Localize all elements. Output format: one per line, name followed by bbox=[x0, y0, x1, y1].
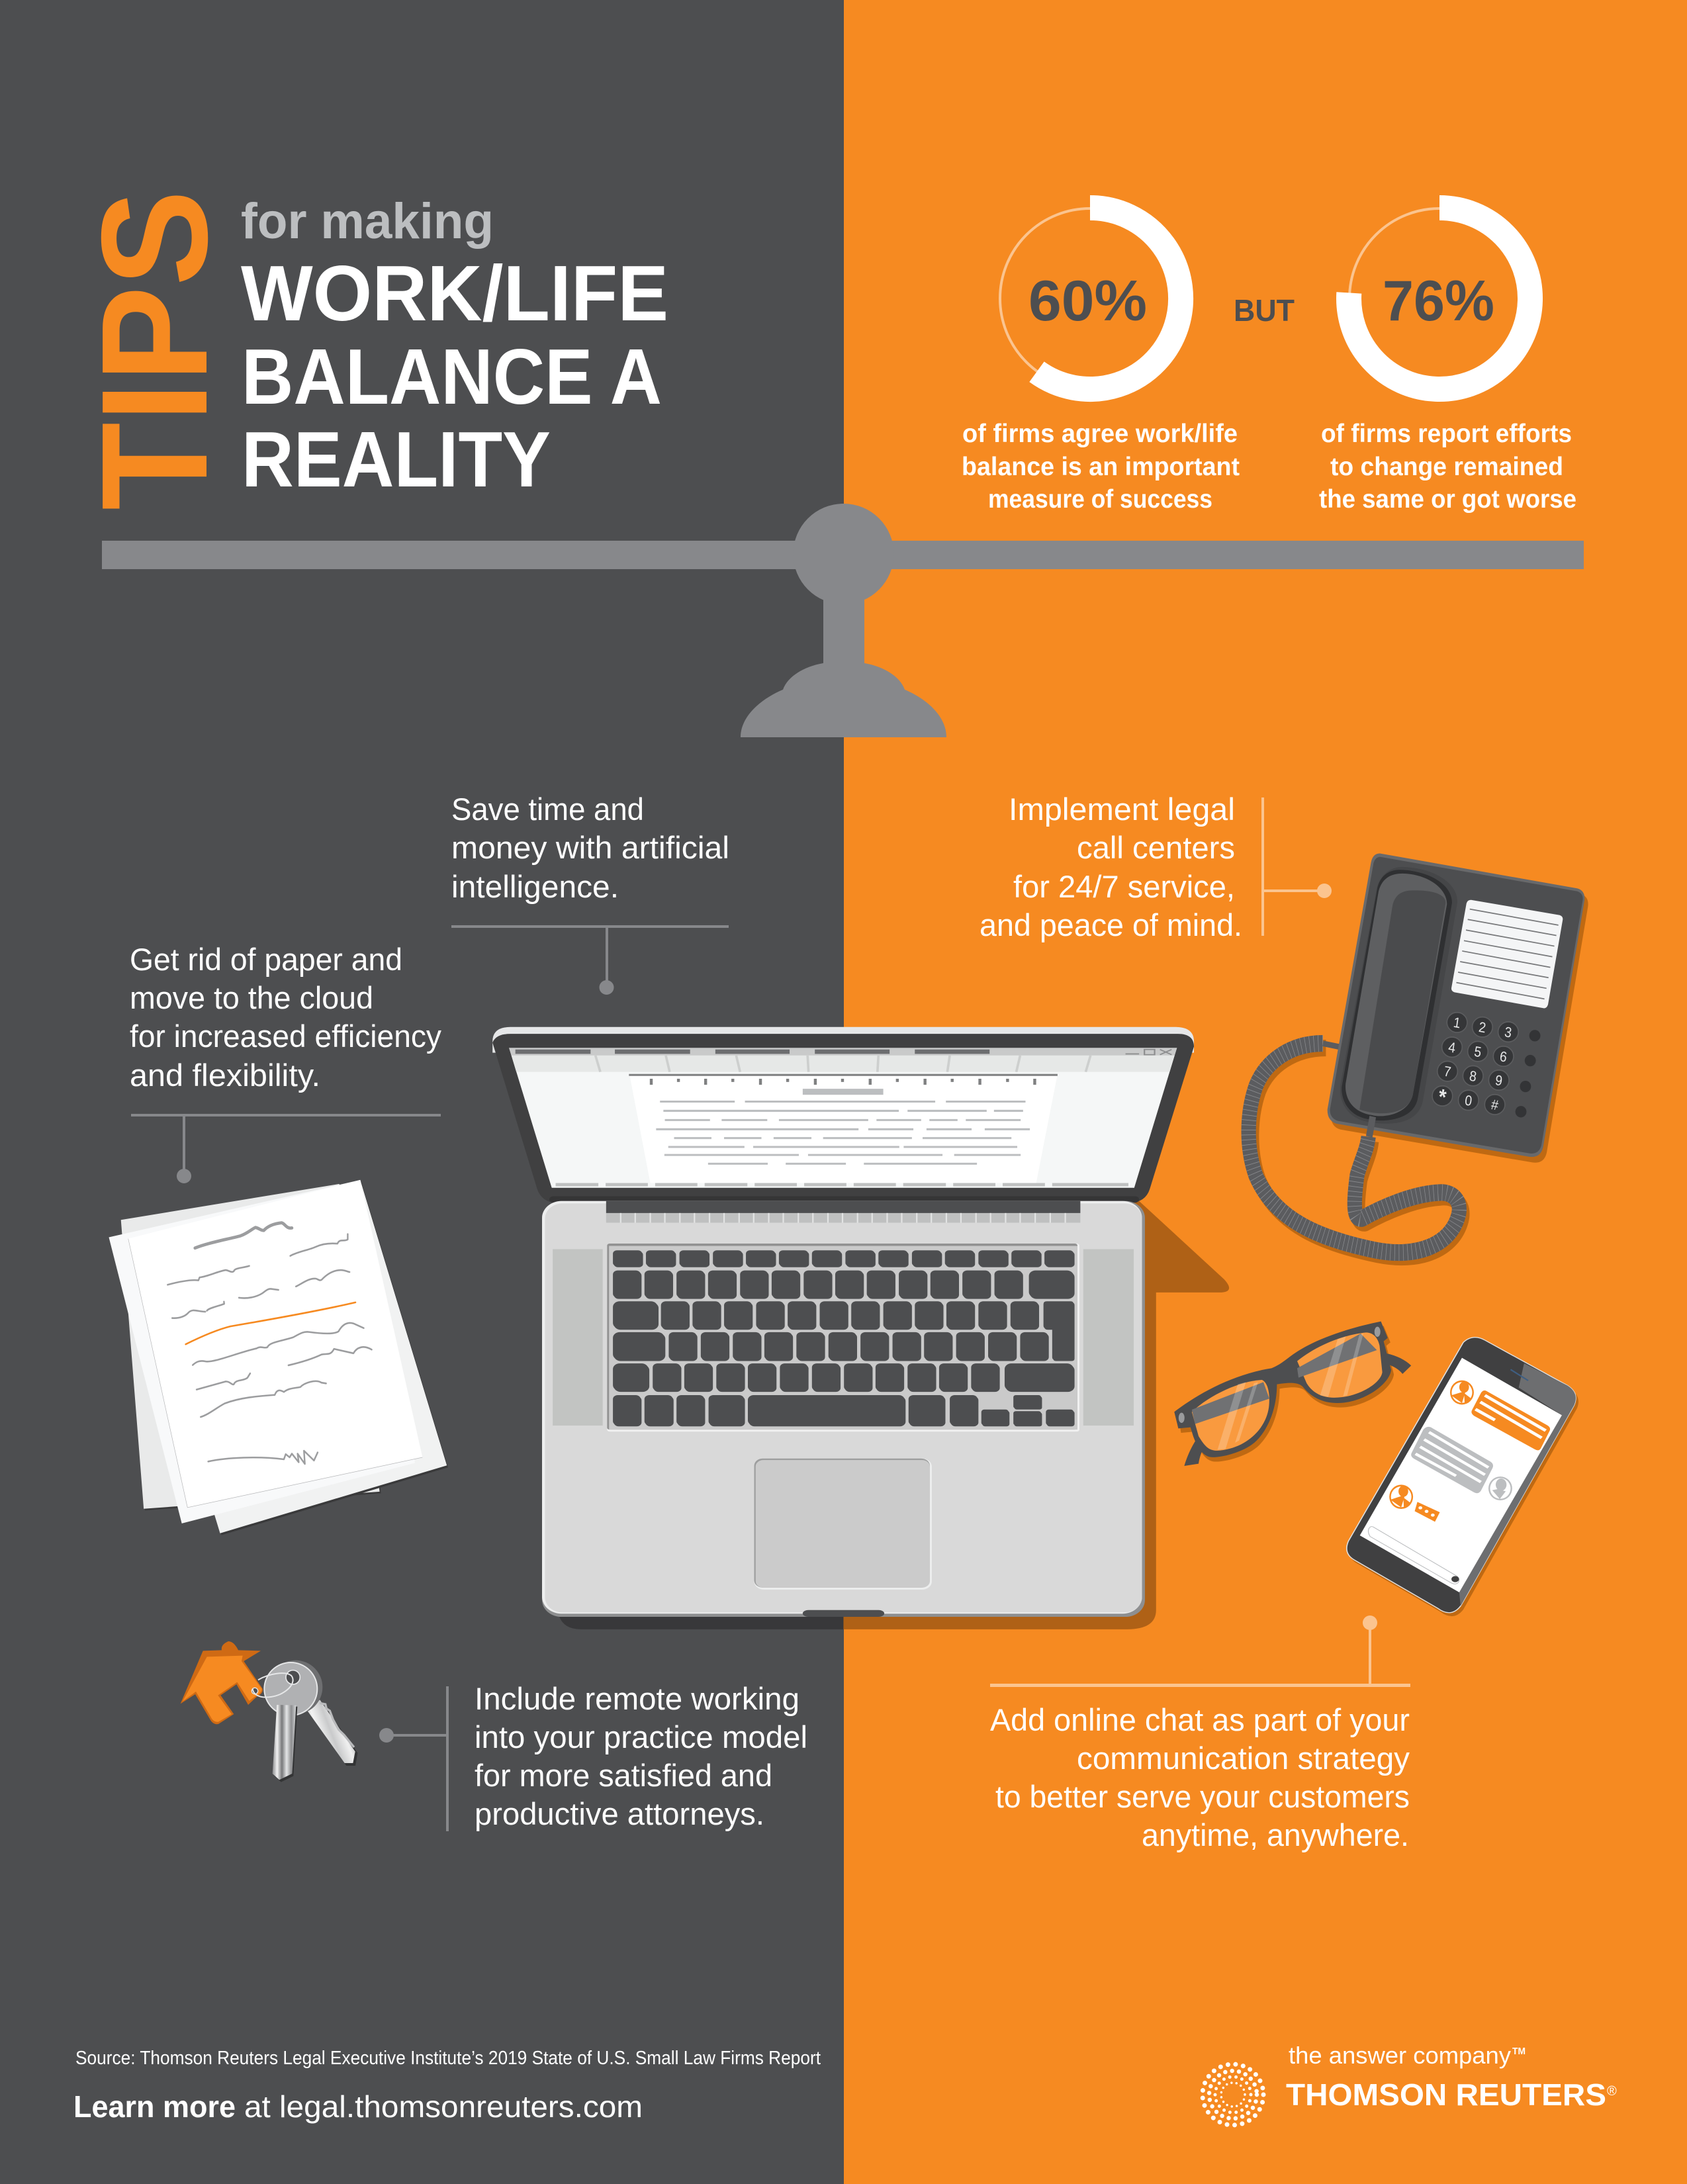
label: BUT: BUT bbox=[1234, 293, 1295, 328]
smartphone body bbox=[1347, 1338, 1578, 1616]
tip: paper and cloud: move to the cloud bbox=[130, 980, 373, 1015]
laptop lid bbox=[492, 1027, 1194, 1203]
wordmark: THOMSON REUTERS bbox=[1286, 2077, 1606, 2112]
caption: 76% stat bbox=[1319, 420, 1576, 514]
keypad digits bbox=[1437, 1015, 1513, 1114]
heading line 2: BALANCE A bbox=[242, 333, 662, 421]
learn more link: Learn more bbox=[73, 2089, 236, 2124]
key heads bbox=[264, 1661, 322, 1715]
chart: 76% donut bbox=[1349, 208, 1530, 389]
tip: online chat: anytime, anywhere. bbox=[1142, 1817, 1409, 1852]
vertical word TIPS: TIPS bbox=[71, 190, 239, 510]
tip: legal call centers: for 24/7 service, bbox=[1013, 869, 1235, 904]
logo dot sphere bbox=[1203, 2064, 1263, 2125]
note card bbox=[1451, 900, 1563, 1008]
icon: paper documents bbox=[109, 1180, 448, 1535]
balance scale bbox=[102, 504, 1584, 737]
panel: orange right background bbox=[844, 0, 1687, 2184]
callout connector: call centers bbox=[1261, 797, 1332, 936]
keypad digits: 5 bbox=[1473, 1044, 1482, 1061]
logo: Thomson Reuters bbox=[1203, 2042, 1617, 2125]
tip: artificial intelligence: Save time and bbox=[451, 792, 644, 827]
earpiece bbox=[1510, 1369, 1528, 1381]
tip: online chat: Add online chat as part of your bbox=[990, 1702, 1410, 1737]
caption: 76% stat: of firms report efforts bbox=[1321, 420, 1572, 448]
caption: 60% stat: measure of success bbox=[988, 485, 1212, 514]
tip: remote working: productive attorneys. bbox=[475, 1796, 764, 1831]
icon: laptop bbox=[492, 1027, 1229, 1629]
tip: legal call centers: call centers bbox=[1077, 830, 1235, 865]
keypad digits: 6 bbox=[1499, 1048, 1508, 1066]
keyboard bbox=[607, 1244, 1079, 1432]
glasses far temple left bbox=[1184, 1418, 1219, 1466]
keypad digits: * bbox=[1437, 1084, 1448, 1110]
side buttons bbox=[1516, 1030, 1540, 1117]
caption: 60% stat: balance is an important bbox=[962, 453, 1240, 481]
glasses far temple right bbox=[1300, 1353, 1411, 1387]
keypad digits: 0 bbox=[1464, 1092, 1473, 1109]
title bbox=[241, 193, 668, 504]
tip: online chat: to better serve your customers bbox=[995, 1779, 1410, 1814]
rivets bbox=[1179, 1327, 1381, 1423]
caption: 76% stat: to change remained bbox=[1330, 453, 1563, 481]
right lens bbox=[1297, 1332, 1383, 1398]
callout connector: keys bbox=[379, 1686, 449, 1831]
tip: paper and cloud: for increased efficiency bbox=[130, 1019, 441, 1054]
caption: 60% stat: of firms agree work/life bbox=[962, 420, 1238, 448]
tip: legal call centers: Implement legal bbox=[1009, 792, 1235, 827]
keypad digits: # bbox=[1490, 1097, 1500, 1114]
tip: paper and cloud bbox=[130, 942, 441, 1093]
keypad digits: 2 bbox=[1478, 1019, 1487, 1036]
value: 60%: 60% bbox=[1028, 269, 1147, 333]
tagline: the answer company bbox=[1289, 2042, 1511, 2069]
left lens bbox=[1192, 1380, 1269, 1451]
icon: house keys bbox=[181, 1641, 357, 1782]
caption: 76% stat: the same or got worse bbox=[1319, 485, 1576, 514]
trademark: TM bbox=[1512, 2046, 1526, 2057]
orange chat bubble bbox=[1471, 1390, 1550, 1450]
keypad bbox=[1432, 1013, 1518, 1115]
tip: paper and cloud: Get rid of paper and bbox=[130, 942, 402, 977]
icon: smartphone with chat bbox=[1347, 1338, 1578, 1616]
typing indicator bbox=[1415, 1502, 1440, 1522]
key house fob bbox=[181, 1641, 263, 1724]
tip: remote working: into your practice model bbox=[475, 1719, 807, 1754]
value: 76%: 76% bbox=[1383, 269, 1494, 333]
tip: artificial intelligence bbox=[451, 792, 729, 904]
tip: remote working: for more satisfied and bbox=[475, 1758, 772, 1793]
icon: eyeglasses bbox=[1174, 1322, 1411, 1466]
callout connector: online chat bbox=[990, 1615, 1410, 1687]
callout connector: artificial intelligence bbox=[451, 925, 729, 995]
registered mark: ® bbox=[1607, 2084, 1617, 2099]
tip: online chat bbox=[990, 1702, 1410, 1852]
glasses frame bbox=[1174, 1322, 1391, 1457]
gray chat bubble bbox=[1411, 1427, 1493, 1493]
handset bbox=[1340, 867, 1457, 1137]
gray avatar bbox=[1488, 1477, 1512, 1500]
subheading: for making: for making bbox=[241, 193, 494, 250]
callout connector: paper bbox=[131, 1114, 441, 1183]
tip: legal call centers bbox=[980, 792, 1242, 942]
laptop shadow bbox=[559, 1201, 1229, 1629]
keypad digits: 7 bbox=[1443, 1064, 1452, 1081]
icon: desk telephone bbox=[1249, 853, 1588, 1257]
tip: artificial intelligence: intelligence. bbox=[451, 869, 619, 904]
key ring bbox=[253, 1673, 293, 1698]
laptop screen bbox=[509, 1048, 1177, 1188]
learn more link bbox=[73, 2089, 643, 2124]
laptop base bbox=[542, 1201, 1145, 1617]
key 1 bbox=[273, 1705, 297, 1782]
key 2 bbox=[306, 1700, 357, 1766]
trackpad bbox=[754, 1459, 932, 1590]
chart: 60% donut bbox=[1000, 208, 1181, 389]
keypad digits: 1 bbox=[1453, 1015, 1461, 1032]
keypad digits: 4 bbox=[1447, 1039, 1457, 1056]
keypad digits: 9 bbox=[1494, 1072, 1504, 1089]
agent avatar 2 bbox=[1389, 1484, 1413, 1509]
tip: paper and cloud: and flexibility. bbox=[130, 1058, 320, 1093]
glasses shadow bbox=[1178, 1326, 1394, 1462]
keypad digits: 3 bbox=[1504, 1024, 1513, 1041]
keypad digits: 8 bbox=[1469, 1068, 1478, 1085]
tip: remote working bbox=[475, 1681, 807, 1831]
message input bbox=[1368, 1527, 1459, 1584]
tip: remote working: Include remote working bbox=[475, 1681, 799, 1716]
tip: legal call centers: and peace of mind. bbox=[980, 907, 1242, 942]
tip: online chat: communication strategy bbox=[1077, 1741, 1410, 1776]
phone cord bbox=[1249, 1044, 1462, 1257]
phone body bbox=[1328, 853, 1588, 1163]
panel: dark left background bbox=[0, 0, 844, 2184]
source note: Source: Thomson Reuters Legal Executive Institute’s 2019 State of U.S. Small Law Firms Report bbox=[75, 2048, 821, 2069]
caption: 60% stat bbox=[962, 420, 1240, 514]
heading line 3: REALITY bbox=[242, 416, 551, 504]
tip: artificial intelligence: money with artificial bbox=[451, 830, 729, 865]
chat screen bbox=[1360, 1358, 1562, 1592]
heading line 1: WORK/LIFE bbox=[241, 250, 668, 338]
learn more link: at legal.thomsonreuters.com bbox=[244, 2089, 643, 2124]
agent avatar 1 bbox=[1450, 1381, 1474, 1404]
